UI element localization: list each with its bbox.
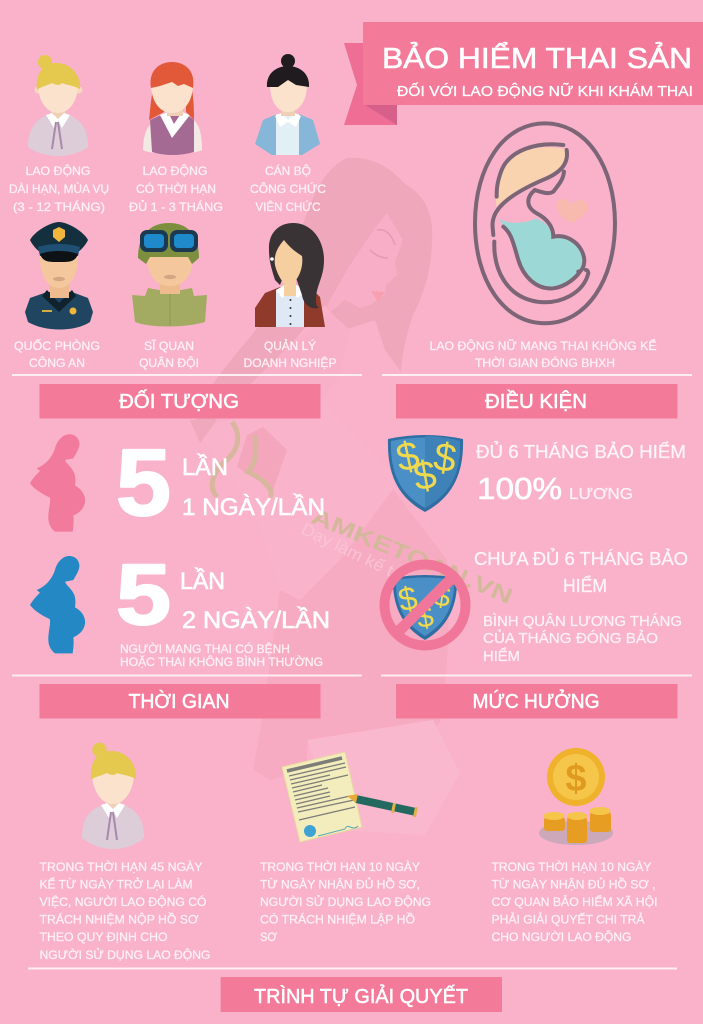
person: long-term worker <box>28 55 88 156</box>
watermark: logo and text: AMKETOAN.VN <box>308 504 516 609</box>
text: employer step: CÓ TRÁCH NHIỆM LẬP HỒ <box>260 912 415 927</box>
text: employer step <box>260 859 431 944</box>
icon: pregnant silhouette pink <box>30 434 85 532</box>
person: worker submitting documents <box>82 743 144 849</box>
title: BẢO HIỂM THAI SẢN <box>382 41 692 75</box>
caption: manager: DOANH NGHIỆP <box>244 355 336 370</box>
text: social insurance step: TRONG THỜI HẠN 10 NGÀY <box>492 859 652 874</box>
heading: Trình tự giải quyết <box>221 977 502 1012</box>
icon: shield with dollars: $ <box>410 452 440 500</box>
caption: fixed-term worker: ĐỦ 1 - 3 THÁNG <box>129 199 223 214</box>
person: army officer <box>132 223 207 326</box>
text: 5 visits, 1 day per visit: 1 NGÀY/LẦN <box>182 493 325 521</box>
text: employee step: VIỆC, NGƯỜI LAO ĐỘNG CÓ <box>40 894 206 909</box>
caption: manager <box>244 338 336 370</box>
big number 5: 5 <box>116 430 171 536</box>
text: 5 visits, 1 day per visit: LẦN <box>182 453 228 481</box>
caption: long-term worker: LAO ĐỘNG <box>26 163 90 178</box>
icon: prohibited shield: $ <box>395 579 421 619</box>
icon: shield with dollars: $ <box>392 433 423 481</box>
person: civil servant <box>255 54 320 155</box>
banner bar <box>363 22 703 105</box>
heading: Trình tự giải quyết: TRÌNH TỰ GIẢI QUYẾT <box>254 985 468 1008</box>
text: social insurance step: CƠ QUAN BẢO HIỂM XÃ HỘI <box>492 894 658 909</box>
caption: civil servant: CÔNG CHỨC <box>250 181 326 196</box>
text: employee step: TRÁCH NHIỆM NỘP HỒ SƠ <box>40 912 199 927</box>
caption: civil servant <box>250 163 326 214</box>
text: social insurance step <box>492 859 658 944</box>
icon: signed document with pen <box>282 752 418 842</box>
text: 5 visits, 2 days per visit: HOẶC THAI KHÔNG BÌNH THƯỜNG <box>120 654 323 669</box>
icon: prohibited shield <box>384 564 466 646</box>
text: 6 months insurance, 100 percent: 100% <box>477 471 562 506</box>
heading: Đối tượng: ĐỐI TƯỢNG <box>119 389 239 413</box>
icon: shield with dollars <box>388 433 463 512</box>
text: employee step: THEO QUY ĐỊNH CHO <box>40 930 168 944</box>
icon: coins: $ <box>565 758 587 800</box>
text: 5 visits, 2 days per visit <box>120 567 330 669</box>
text: 6 months insurance, 100 percent: LƯƠNG <box>569 486 633 503</box>
ribbon fold <box>365 105 397 125</box>
caption: condition <box>430 338 656 370</box>
person: police officer <box>25 222 93 330</box>
caption: manager: QUẢN LÝ <box>264 338 316 353</box>
icon: pregnant silhouette blue <box>30 556 85 653</box>
text: 5 visits, 2 days per visit: NGƯỜI MANG THAI CÓ BỆNH <box>120 641 290 656</box>
caption: defence and police: CÔNG AN <box>29 355 85 370</box>
caption: condition: THỜI GIAN ĐÓNG BHXH <box>475 355 615 370</box>
text: under 6 months insurance: BÌNH QUÂN LƯƠNG THÁNG <box>483 613 682 630</box>
text: employee step: TRONG THỜI HẠN 45 NGÀY <box>40 859 202 874</box>
icon: prohibited shield: $ <box>414 600 436 635</box>
text: 5 visits, 2 days per visit: LẦN <box>180 567 225 595</box>
text: social insurance step: CHO NGƯỜI LAO ĐỘNG <box>492 929 632 944</box>
heading: Điều kiện <box>396 384 678 418</box>
heading: Thời gian <box>40 684 320 718</box>
text: 5 visits, 1 day per visit <box>182 453 325 521</box>
caption: civil servant: CÁN BỘ <box>265 163 311 178</box>
text: under 6 months insurance: HIỂM <box>563 575 607 596</box>
heading: Điều kiện: ĐIỀU KIỆN <box>485 390 587 413</box>
heading: Đối tượng <box>40 384 320 418</box>
caption: condition: LAO ĐỘNG NỮ MANG THAI KHÔNG KỂ <box>430 338 656 353</box>
caption: army officer: SĨ QUAN <box>144 339 194 353</box>
caption: fixed-term worker: LAO ĐỘNG <box>142 163 208 178</box>
person: manager <box>255 223 325 327</box>
caption: army officer <box>139 339 199 370</box>
title banner <box>344 22 703 125</box>
caption: long-term worker <box>9 163 109 214</box>
watermark: logo and text: Dạy làm kế toán <box>298 520 423 594</box>
icon: prohibited shield: $ <box>431 579 453 614</box>
big number 5 second: 5 <box>116 547 171 643</box>
text: employee step: NGƯỜI SỬ DỤNG LAO ĐỘNG <box>40 947 210 962</box>
text: employee step <box>40 859 210 962</box>
caption: fixed-term worker: CÓ THỜI HẠN <box>136 181 216 196</box>
text: employer step: NGƯỜI SỬ DỤNG LAO ĐỘNG <box>260 894 431 909</box>
text: employer step: TRONG THỜI HẠN 10 NGÀY <box>260 859 420 874</box>
text: employee step: KỂ TỪ NGÀY TRỞ LẠI LÀM <box>40 877 192 892</box>
caption: defence and police: QUỐC PHÒNG <box>14 338 100 353</box>
heading: Mức hưởng <box>396 684 678 718</box>
text: social insurance step: PHẢI GIẢI QUYẾT CHI TRẢ <box>492 912 644 927</box>
ribbon tail <box>344 43 397 125</box>
watermark: large woman silhouette <box>190 158 460 835</box>
caption: army officer: QUÂN ĐỘI <box>139 355 199 370</box>
heading: Thời gian: THỜI GIAN <box>128 690 230 713</box>
caption: long-term worker: (3 - 12 THÁNG) <box>13 199 105 214</box>
text: under 6 months insurance <box>474 548 688 665</box>
text: under 6 months insurance: CHƯA ĐỦ 6 THÁNG BẢO <box>474 548 688 569</box>
heading: Mức hưởng: MỨC HƯỞNG <box>472 689 600 713</box>
text: 5 visits, 2 days per visit: 2 NGÀY/LẦN <box>182 606 330 634</box>
caption: defence and police <box>14 338 100 370</box>
caption: fixed-term worker <box>129 163 223 214</box>
icon: shield with dollars: $ <box>431 435 459 481</box>
text: 6 months insurance, 100 percent: ĐỦ 6 THÁNG BẢO HIỂM <box>476 441 686 462</box>
subtitle: ĐỐI VỚI LAO ĐỘNG NỮ KHI KHÁM THAI <box>397 82 693 100</box>
text: employer step: SƠ <box>260 930 278 944</box>
text: under 6 months insurance: CỦA THÁNG ĐÓNG BẢO <box>483 629 658 647</box>
caption: civil servant: VIÊN CHỨC <box>256 199 321 214</box>
text: under 6 months insurance: HIỂM <box>483 647 520 665</box>
icon: pregnant woman in oval <box>475 123 615 323</box>
text: social insurance step: TỪ NGÀY NHẬN ĐỦ HỒ SƠ , <box>492 877 656 892</box>
text: employer step: TỪ NGÀY NHẬN ĐỦ HỒ SƠ, <box>260 877 420 892</box>
caption: long-term worker: DÀI HẠN, MÙA VỤ <box>9 181 109 196</box>
person: fixed-term worker <box>143 62 202 155</box>
text: 6 months insurance, 100 percent <box>476 441 686 506</box>
icon: coins <box>539 748 613 845</box>
watermark: logo and text <box>212 422 516 609</box>
